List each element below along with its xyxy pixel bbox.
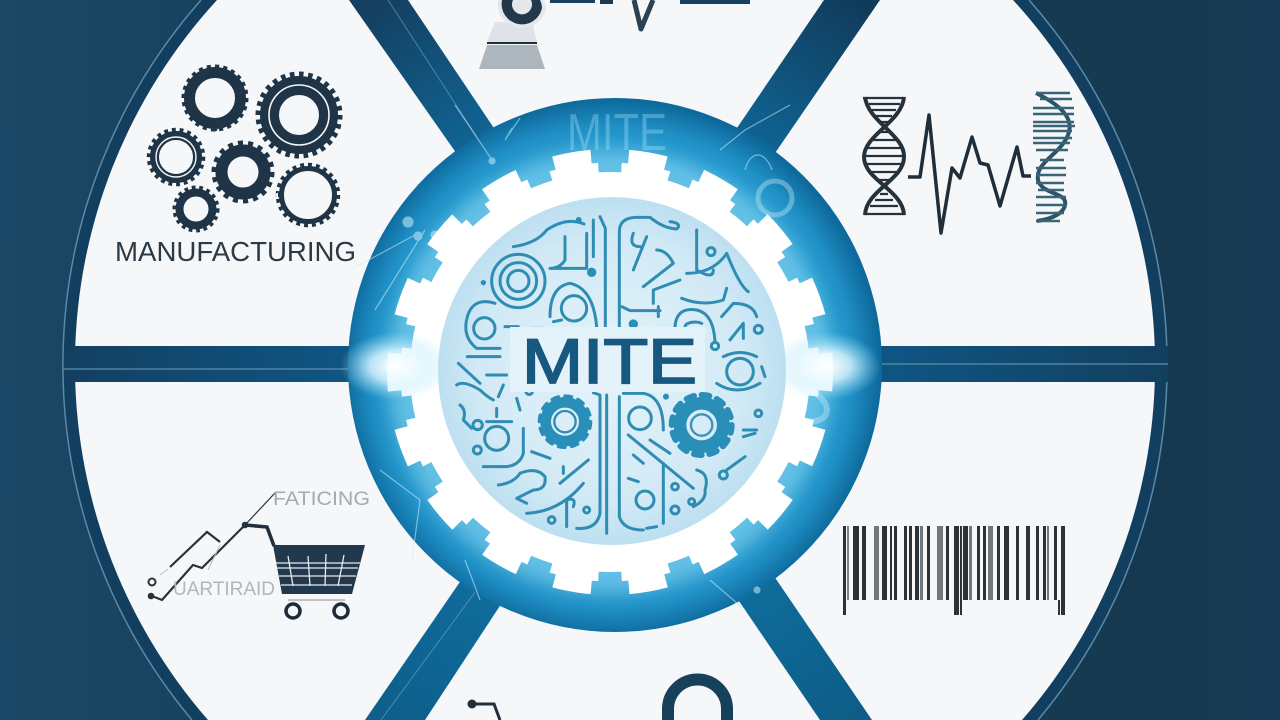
white gear [394,156,826,588]
icon: robot arm base [479,0,546,69]
icon: dna right [1033,93,1075,221]
ghost title: MITE [567,104,667,162]
label: manufacturing: MANUFACTURING [115,236,356,267]
icon: barcode [843,526,1065,615]
icon: brain gear right [672,395,732,455]
icon: brain gear left [539,396,591,447]
hub circuit decoration [350,105,827,610]
panel: bottom [469,680,727,720]
icon: small connector [469,701,500,720]
icon: arch [668,680,727,720]
icon: growth chart line [148,493,275,600]
circuit brain [457,217,765,533]
panel: robotics top [479,0,750,69]
icon: signal and bars [550,0,750,29]
central hub [330,98,930,632]
light flares [330,332,930,400]
panel: manufacturing [115,67,356,267]
circuit nodes [481,217,669,400]
icon: gear cluster [149,67,340,230]
panel: biotech [863,93,1075,233]
inner disc [438,197,786,545]
label: faint chart text: FATICING [273,489,370,510]
title plate [510,327,705,392]
gear glow [388,150,832,594]
hub circle [348,98,882,632]
icon: shopping cart [245,525,365,618]
panel: barcode [843,526,1065,615]
icon: ecg line [908,115,1031,233]
title: MITE [522,327,697,397]
panel: retail [148,489,370,618]
label: faint cart text: UARTIRAID [173,579,275,600]
icon: dna left [863,97,905,215]
